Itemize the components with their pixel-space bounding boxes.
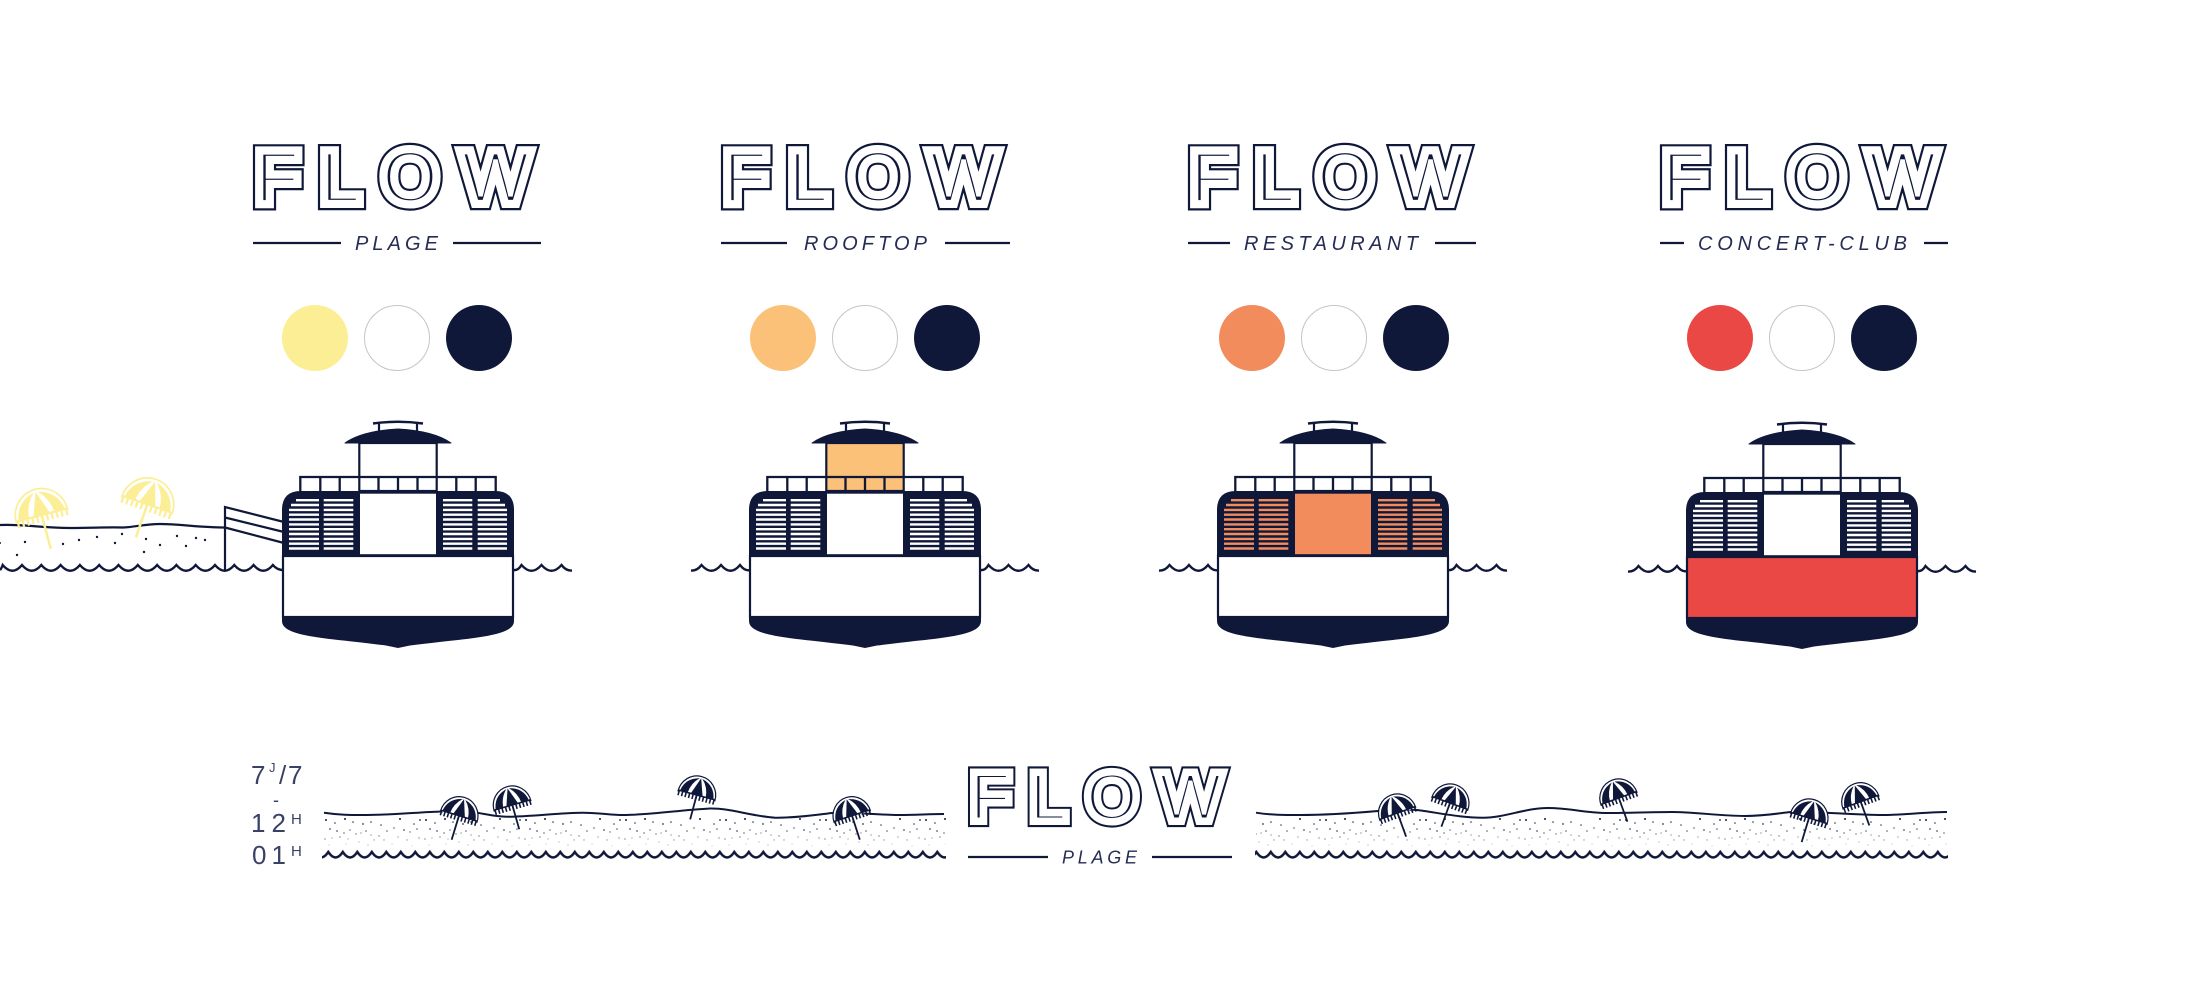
opening hours text <box>251 760 302 870</box>
boat: rooftop <box>691 422 1039 648</box>
opening hours text: H <box>291 843 302 860</box>
opening hours text: 7 <box>288 760 302 790</box>
colour swatches: plage <box>282 305 512 371</box>
logo: FLOW plage banner: FLOW <box>970 760 1222 834</box>
beach scene: sand and yellow umbrellas <box>0 471 225 556</box>
infographic canvas <box>0 142 1976 864</box>
logo: FLOW rooftop: FLOW <box>723 138 998 218</box>
water: waves <box>0 565 283 571</box>
opening hours text: - <box>273 790 279 810</box>
panel: concert-club <box>1628 138 1976 649</box>
banner: bottom strip <box>251 760 1948 870</box>
colour swatches: concert-club <box>1687 305 1917 371</box>
logo: FLOW concert-club: FLOW <box>1662 138 1937 218</box>
boat: restaurant <box>1159 422 1507 648</box>
opening hours text: J <box>269 760 276 775</box>
logo: FLOW plage banner: FLOW <box>970 760 1222 834</box>
logo: FLOW rooftop: FLOW <box>723 138 998 218</box>
beach strip: left <box>322 772 946 862</box>
logo: FLOW rooftop: FLOW <box>723 138 998 218</box>
logo: FLOW plage: FLOW <box>255 138 530 218</box>
dock: gangway <box>225 507 284 570</box>
logo: FLOW concert-club: FLOW <box>1662 138 1937 218</box>
opening hours text: H <box>291 811 302 828</box>
subtitle: plage: PLAGE <box>355 233 439 255</box>
logo: FLOW restaurant: FLOW <box>1190 138 1465 218</box>
opening hours text: 7 <box>251 760 265 790</box>
opening hours text: / <box>279 760 287 790</box>
logo: FLOW restaurant: FLOW <box>1190 138 1465 218</box>
subtitle: rooftop: ROOFTOP <box>804 233 928 255</box>
colour swatches: restaurant <box>1219 305 1449 371</box>
beach strip: right <box>1255 774 1948 862</box>
logo: FLOW restaurant: FLOW <box>1190 138 1465 218</box>
opening hours text: 01 <box>252 840 286 870</box>
logo: FLOW plage: FLOW <box>255 138 530 218</box>
boat: concert-club <box>1628 423 1976 649</box>
colour swatches: rooftop <box>750 305 980 371</box>
subtitle: restaurant: RESTAURANT <box>1244 233 1420 255</box>
panel: rooftop <box>691 138 1039 648</box>
boat: plage <box>282 422 572 648</box>
logo: FLOW plage banner: FLOW <box>970 760 1222 834</box>
subtitle: plage banner: PLAGE <box>1062 848 1138 868</box>
logo: FLOW plage: FLOW <box>255 138 530 218</box>
opening hours text: 12 <box>251 808 286 838</box>
logo: FLOW concert-club: FLOW <box>1662 138 1937 218</box>
panel: restaurant <box>1159 138 1507 648</box>
subtitle: concert-club: CONCERT-CLUB <box>1698 233 1907 255</box>
panel: plage <box>0 138 572 648</box>
